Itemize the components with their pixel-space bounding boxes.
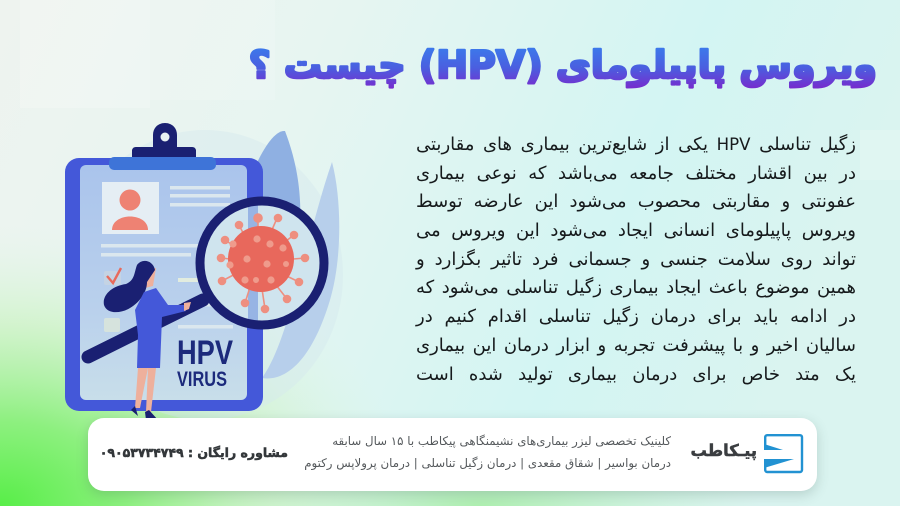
clipboard bbox=[65, 123, 263, 411]
illustration: HPV clipboard and magnifier bbox=[65, 123, 340, 418]
free consultation phone: مشاوره رایگان : ۰۹۰۵۳۷۳۴۷۴۹ bbox=[100, 445, 288, 460]
footer card bbox=[88, 418, 817, 491]
paragraph: یک متد خاص برای درمان بیماری تولید شده است bbox=[416, 364, 856, 384]
label: HPV VIRUS: HPV bbox=[177, 334, 233, 372]
clinic info: درمان بواسیر | شقاق مقعدی | درمان زگیل تناسلی | درمان پرولاپس رکتوم bbox=[304, 456, 671, 470]
icon: background leaves bbox=[67, 130, 343, 420]
brand logo bbox=[691, 434, 804, 474]
clinic info: کلینیک تخصصی لیزر بیماری‌های نشیمنگاهی پیکاطب با ۱۵ سال سابقه bbox=[332, 434, 671, 448]
woman figure bbox=[104, 261, 191, 420]
icon: virus bbox=[218, 214, 308, 312]
paragraph: عفونتی و مقاربتی محصوب می‌شود این عارضه توسط bbox=[416, 191, 856, 212]
paragraph: سالیان اخیر و با پیشرفت تجربه و ابزار درمان این بیماری bbox=[416, 335, 856, 356]
paragraph: همین موضوع باعث ایجاد بیماری زگیل تناسلی می‌شود که bbox=[416, 277, 856, 298]
paragraph: ویروس پاپیلومای انسانی ایجاد می‌شود این ویروس می bbox=[416, 220, 856, 241]
title: ویروس پاپیلومای (HPV) چیست ؟ bbox=[249, 43, 877, 88]
paragraph: تواند روی سلامت جنسی و جسمانی فرد تاثیر بگزارد و bbox=[416, 249, 856, 270]
paragraph: زگیل تناسلی HPV یکی از شایع‌ترین بیماری های مقاربتی bbox=[416, 134, 856, 155]
icon: check mark bbox=[107, 268, 121, 283]
paragraph: در بین اقشار مختلف جامعه می‌باشد که نوعی بیماری bbox=[416, 163, 856, 184]
icon: logo mark bbox=[764, 434, 804, 474]
clinic info bbox=[304, 434, 671, 470]
document lines bbox=[101, 186, 233, 332]
label: HPV VIRUS bbox=[177, 334, 233, 391]
paragraph: در ادامه باید برای درمان زگیل تناسلی اقدام کنیم در bbox=[416, 306, 856, 327]
paragraph bbox=[415, 134, 856, 384]
brand name: پیـکاطب bbox=[691, 441, 757, 460]
document photo bbox=[102, 182, 159, 234]
label: HPV VIRUS: VIRUS bbox=[177, 368, 227, 391]
magnifying glass with virus bbox=[88, 201, 324, 357]
